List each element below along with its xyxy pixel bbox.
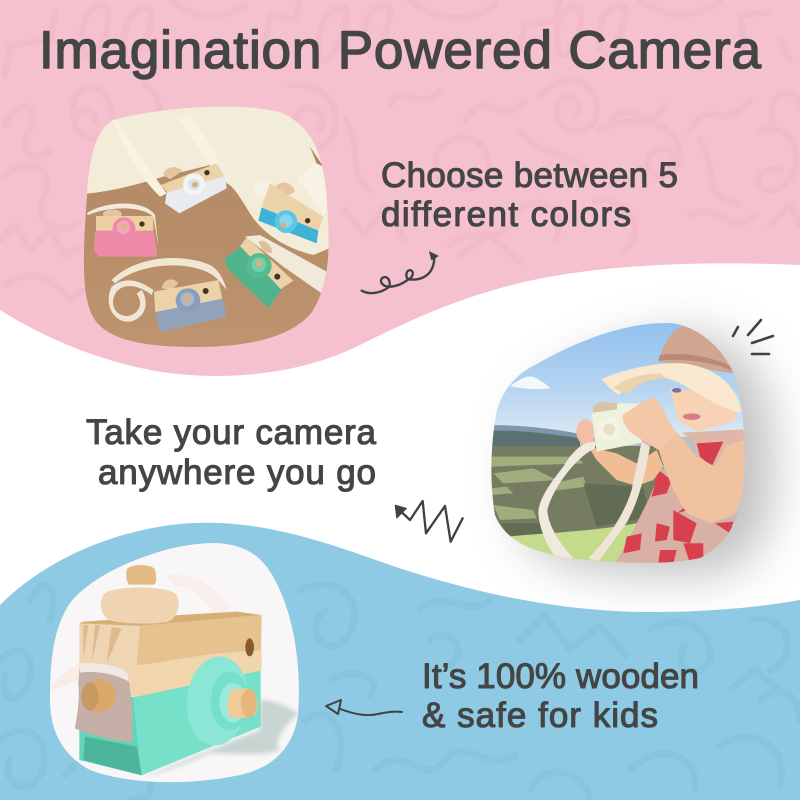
text: choose between colors	[381, 156, 678, 234]
toy camera	[592, 403, 645, 452]
green camera	[225, 235, 327, 308]
wood side and front faces	[79, 623, 140, 697]
pink camera	[87, 204, 158, 257]
text: wooden and safe: & safe for kids	[422, 696, 658, 735]
strap ghost and shadow	[167, 574, 230, 615]
dress lower	[613, 467, 740, 567]
hat crown	[658, 327, 733, 373]
white camera	[161, 163, 227, 213]
blue camera	[255, 182, 323, 243]
top knob	[101, 587, 179, 624]
arrow: zigzag pointing left	[395, 501, 463, 542]
text: choose between colors: Choose between 5	[381, 156, 678, 195]
photo: five colorful wooden cameras	[84, 106, 329, 347]
text: take your camera anywhere: Take your camera	[86, 413, 377, 452]
text: wooden and safe	[422, 657, 699, 735]
left arm and hand	[588, 447, 663, 486]
right arm	[655, 432, 745, 523]
cream waffle blanket	[80, 100, 333, 255]
lens	[186, 656, 248, 746]
hat brim	[602, 363, 742, 413]
text: choose between colors: different colors	[381, 195, 631, 234]
text: take your camera anywhere: anywhere you go	[98, 453, 376, 492]
panel: pink wave background	[0, 0, 800, 376]
photo shadow: middle blob	[519, 335, 773, 575]
title: Imagination Powered Camera	[39, 21, 762, 80]
face	[670, 388, 737, 432]
fabric strap and peg	[75, 663, 133, 743]
text: wooden and safe: It’s 100% wooden	[422, 657, 699, 696]
text: take your camera anywhere	[86, 413, 377, 492]
right hand	[623, 398, 677, 450]
icon: spark lines	[733, 320, 773, 354]
grey camera with strap	[109, 258, 227, 332]
cloud	[510, 377, 550, 389]
panel: blue wave background	[0, 523, 800, 800]
dress upper	[682, 429, 745, 467]
mint lower body	[133, 671, 261, 775]
photo: toddler with wooden camera in a sun hat	[487, 317, 753, 567]
photo: close-up mint wooden camera	[50, 543, 299, 782]
straps	[538, 442, 595, 558]
arrow: curly squiggle pointing up	[362, 252, 438, 293]
distant hills and valley	[490, 425, 580, 450]
arrow: wavy pointing left	[326, 700, 402, 715]
